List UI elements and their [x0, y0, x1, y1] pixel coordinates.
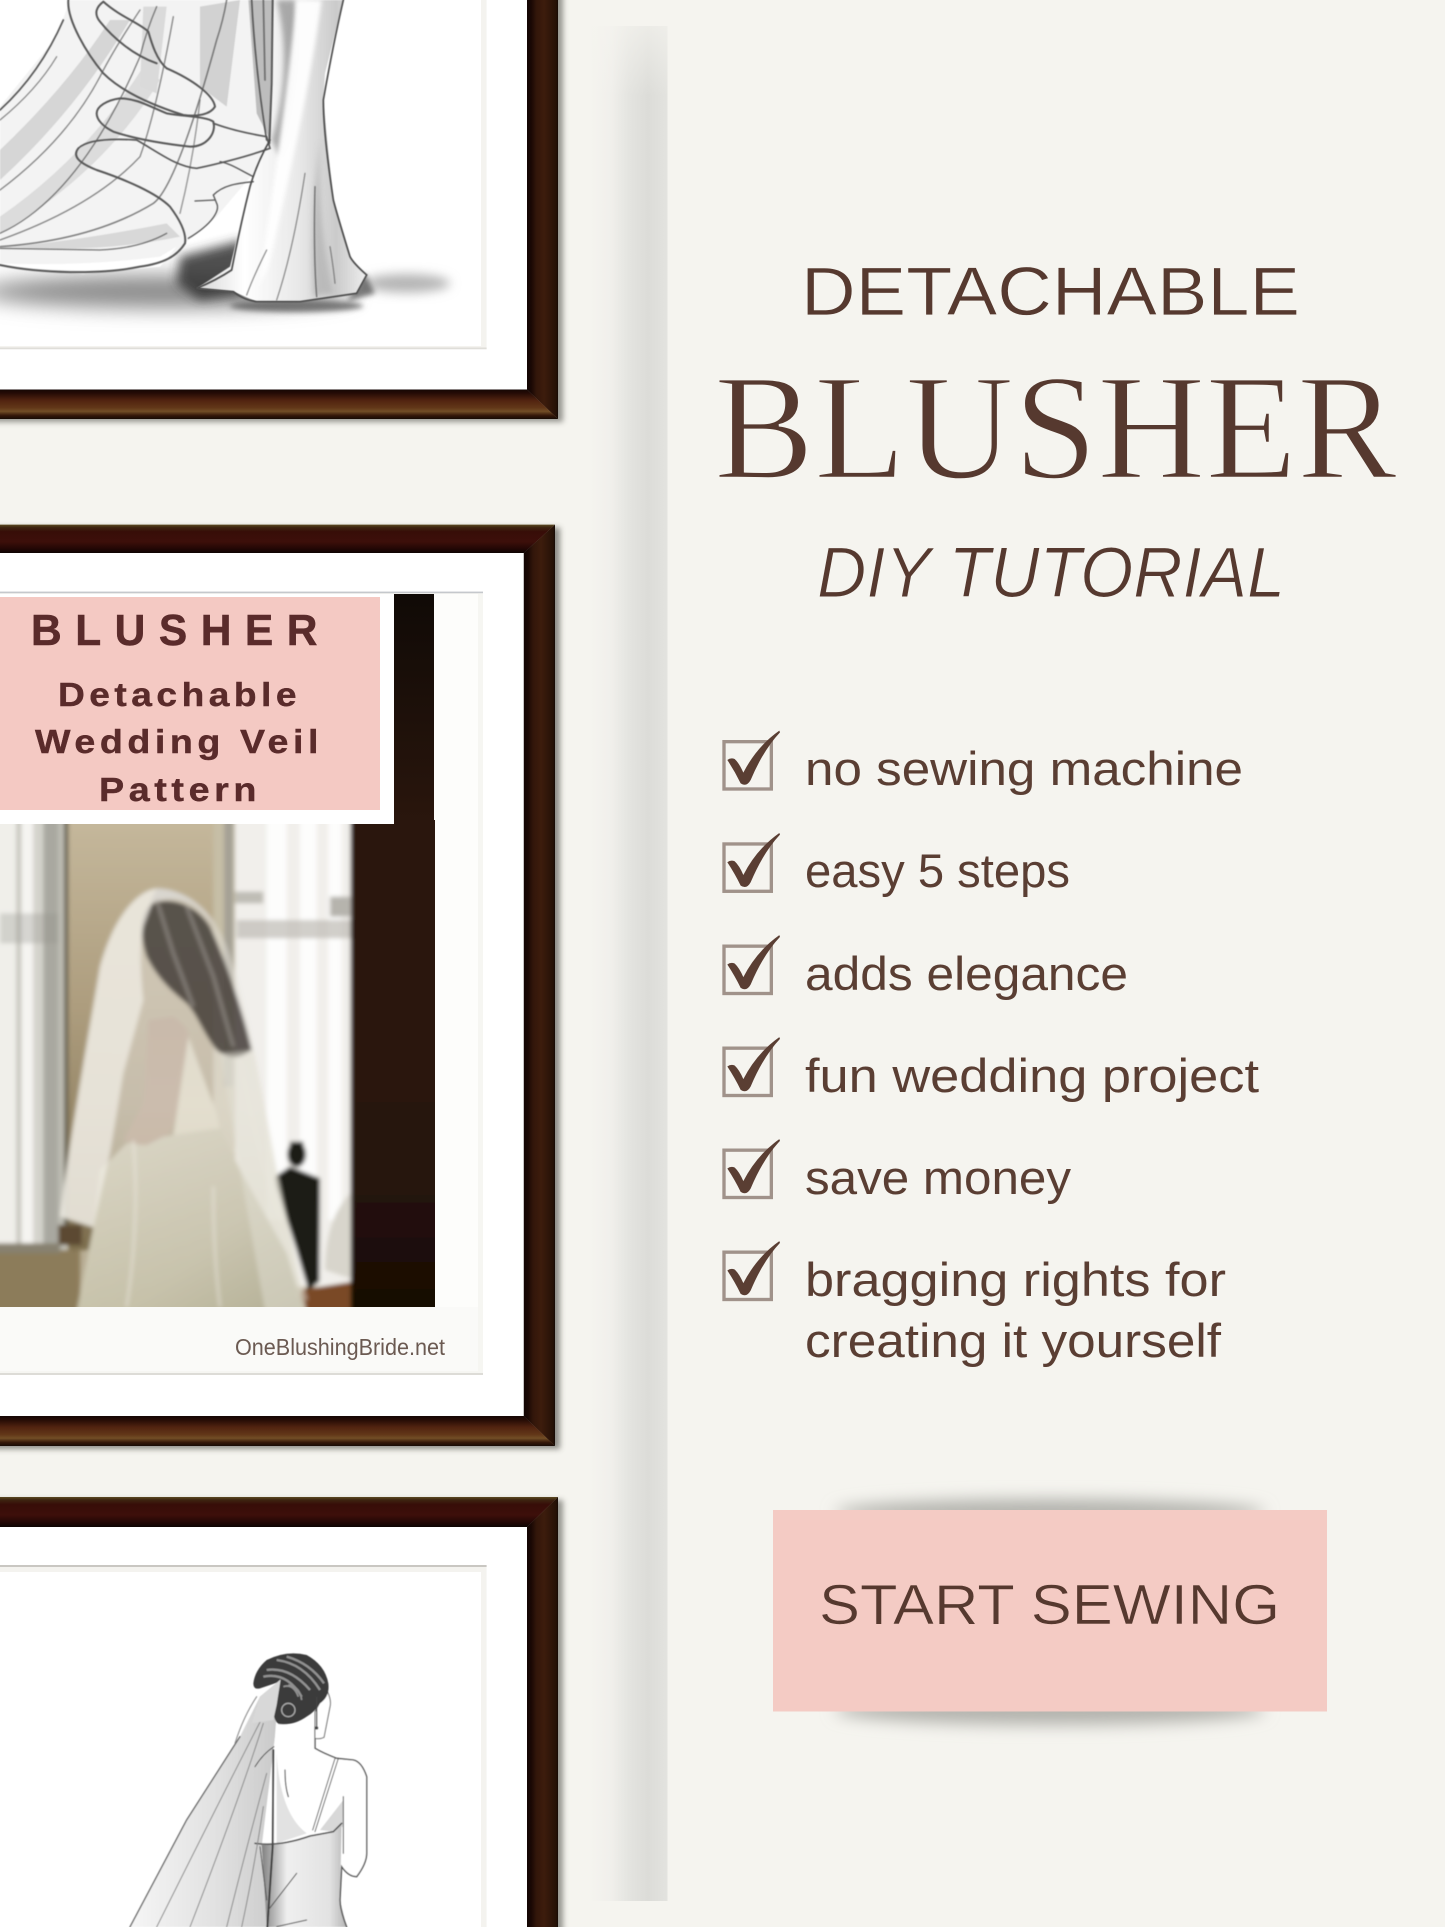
panel title BLUSHER: BLUSHER — [31, 606, 331, 655]
button: start sewing — [773, 1499, 1327, 1725]
panel subtitle line 2: Wedding Veil — [35, 723, 323, 760]
item: bragging rights — [724, 1241, 1226, 1367]
item: easy 5 steps: easy 5 steps — [805, 844, 1070, 897]
illustration: gown hem and veil — [0, 0, 450, 312]
button: start sewing: START SEWING — [819, 1573, 1280, 1637]
illustration: bride back view — [130, 1653, 367, 1927]
panel subtitle line 3: Pattern — [99, 771, 261, 808]
dark strip right of title — [394, 594, 434, 826]
item: fun wedding project — [724, 1037, 1259, 1102]
white title backing — [0, 594, 394, 824]
pink title panel — [0, 597, 380, 810]
item: bragging rights: creating it yourself — [805, 1314, 1222, 1367]
item: easy 5 steps — [724, 833, 1070, 897]
item: no sewing machine: no sewing machine — [805, 742, 1243, 795]
shadow band — [590, 26, 668, 1901]
panel subtitle line 1: Detachable — [58, 676, 301, 713]
framed photo: blusher wedding veil pattern cover — [0, 525, 560, 1449]
item: save money — [724, 1139, 1072, 1204]
item: fun wedding project: fun wedding project — [805, 1049, 1259, 1102]
item: bragging rights: bragging rights for — [805, 1253, 1226, 1306]
website credit: OneBlushingBride.net — [235, 1334, 446, 1360]
title: DETACHABLE: DETACHABLE — [801, 253, 1300, 330]
item: no sewing machine — [724, 731, 1243, 795]
item: adds elegance — [724, 935, 1128, 1000]
item: save money: save money — [805, 1151, 1072, 1204]
photo: bride in veil at window — [0, 820, 435, 1307]
framed illustration: bride with long veil — [0, 1497, 563, 1927]
checklist — [724, 731, 1259, 1367]
title: BLUSHER: BLUSHER — [714, 343, 1397, 511]
framed illustration: veil and gown hem — [0, 0, 563, 422]
title: DIY TUTORIAL: DIY TUTORIAL — [817, 534, 1285, 613]
item: adds elegance: adds elegance — [805, 947, 1128, 1000]
